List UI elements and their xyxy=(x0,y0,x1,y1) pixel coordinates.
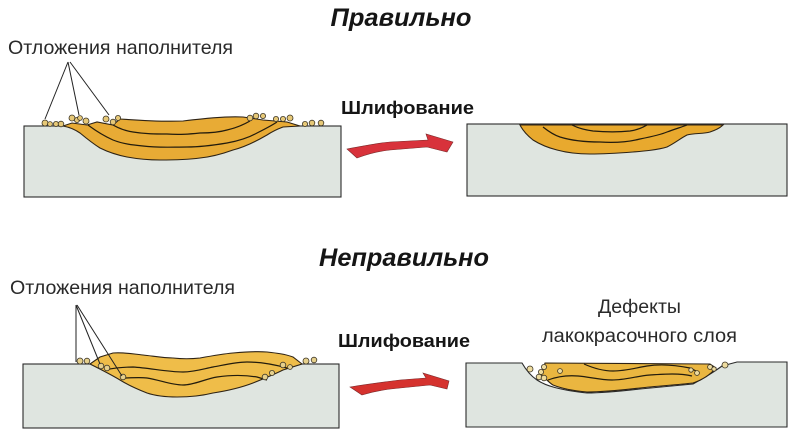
base layer xyxy=(24,126,341,197)
label: paint defects: лакокрасочного слоя xyxy=(542,326,737,347)
base layer xyxy=(466,362,787,427)
layer line outer xyxy=(543,125,687,142)
leader lines xyxy=(45,62,109,119)
arrow: incorrect xyxy=(350,373,449,395)
label: filler deposits, incorrect: Отложения наполнителя xyxy=(10,277,235,299)
label: paint defects xyxy=(542,297,737,347)
label: filler deposits, correct: Отложения наполнителя xyxy=(8,37,233,59)
layer line lower xyxy=(88,122,277,147)
label: sanding, correct: Шлифование xyxy=(341,97,474,118)
filler layers xyxy=(90,352,302,397)
layer line upper xyxy=(584,364,698,372)
arrow: correct xyxy=(347,134,453,158)
layer line lower xyxy=(548,374,692,380)
label: sanding, incorrect: Шлифование xyxy=(338,330,470,351)
leader lines xyxy=(76,305,122,376)
filler layers xyxy=(520,125,723,154)
panel: incorrect, after sanding xyxy=(466,362,787,427)
layer line inner xyxy=(572,125,647,132)
layer line upper xyxy=(105,362,287,372)
filler deposits xyxy=(77,357,317,380)
panel: incorrect, before sanding xyxy=(23,305,339,428)
layer line lower xyxy=(123,376,267,385)
filler layers xyxy=(63,117,300,160)
filler deposits xyxy=(42,113,324,127)
label: paint defects: Дефекты xyxy=(598,297,681,318)
title: incorrect: Неправильно xyxy=(319,244,489,272)
base layer xyxy=(23,364,339,428)
layer line upper xyxy=(113,121,250,134)
title: correct: Правильно xyxy=(330,4,472,32)
panel: correct, before sanding xyxy=(24,62,341,197)
panel: correct, after sanding xyxy=(467,124,787,196)
base layer xyxy=(467,124,787,196)
filler layers xyxy=(541,363,716,392)
filler deposits xyxy=(527,362,728,381)
